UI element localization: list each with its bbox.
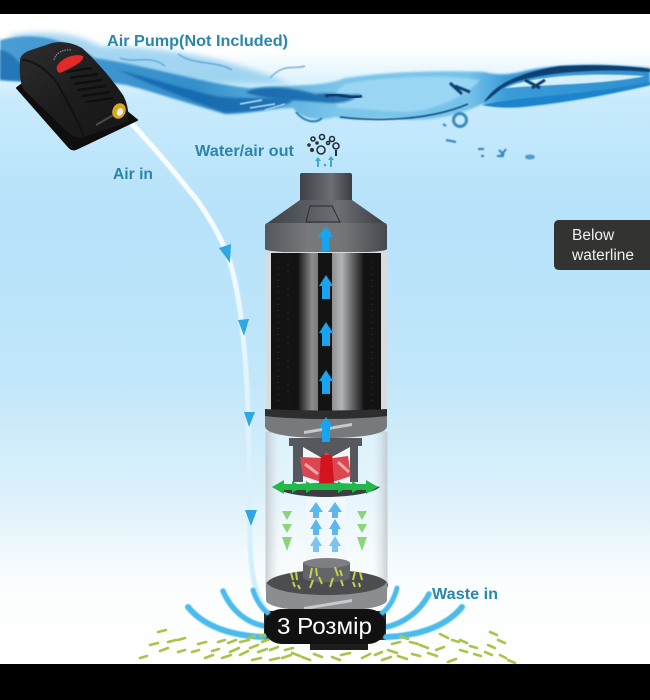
callout: below waterline: Below <box>572 227 615 244</box>
red impeller <box>300 452 351 481</box>
label: air in: Air in <box>113 166 153 183</box>
pump red dial <box>57 55 83 73</box>
air pump <box>17 42 137 149</box>
filter upper band <box>265 223 387 253</box>
caption: size badge: 3 Розмір <box>277 613 372 639</box>
waste particles on floor <box>140 630 515 663</box>
callout: below waterline <box>554 220 650 270</box>
impeller housing <box>289 438 362 483</box>
blue intake flow arcs <box>188 588 462 637</box>
waste collection dish <box>266 558 388 611</box>
label: water/air out: Water/air out <box>195 143 294 160</box>
tube flow arrows <box>219 244 257 526</box>
falling water droplets <box>443 114 535 160</box>
diffuser disk <box>272 483 380 497</box>
air tube <box>122 115 268 613</box>
glass sleeve <box>266 252 387 414</box>
black sponge <box>271 253 381 413</box>
inner clear tube <box>306 497 346 563</box>
water surface splash <box>0 33 650 121</box>
pump brass outlet <box>110 101 128 121</box>
filter device <box>264 173 388 640</box>
label: air pump: Air Pump(Not Included) <box>107 33 288 50</box>
label: waste in: Waste in <box>432 586 498 603</box>
icon: exiting bubbles <box>307 134 339 167</box>
top black bar <box>0 0 650 14</box>
waste specks in dish <box>291 567 362 589</box>
filter shoulder <box>266 200 386 224</box>
blue upward arrows <box>309 502 342 552</box>
green horizontal flow arrow <box>272 480 378 494</box>
blue upward arrows in central column <box>318 226 333 442</box>
filter base <box>264 611 386 640</box>
callout: below waterline: waterline <box>571 247 634 264</box>
clear lower chamber <box>266 432 387 600</box>
middle collar <box>265 412 387 438</box>
green downward arrows <box>282 511 367 551</box>
filter outlet neck <box>300 173 352 202</box>
caption: size badge <box>264 609 386 650</box>
bottom black bar <box>0 664 650 700</box>
